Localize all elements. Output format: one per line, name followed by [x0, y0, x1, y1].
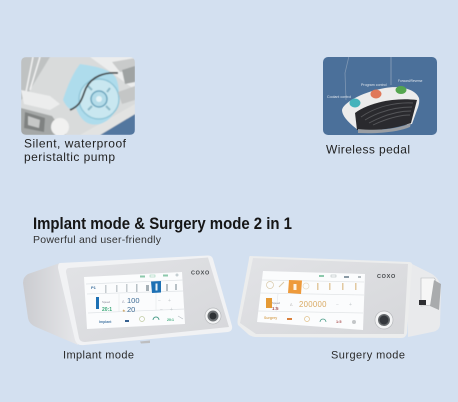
active tab [151, 281, 161, 293]
touchscreen [84, 272, 185, 329]
panel: peristaltic pump photo [21, 57, 135, 136]
touchscreen: + [349, 302, 352, 308]
touchscreen: + [170, 307, 173, 313]
control knob [375, 311, 393, 329]
text: wireless pedal caption: Wireless pedal [326, 142, 410, 156]
mode label: Surgery [264, 316, 277, 320]
text: implant mode label: Implant mode [63, 350, 134, 362]
touchscreen: Speed [272, 301, 281, 305]
touchscreen: 20:1 [167, 318, 174, 322]
control knob [205, 308, 221, 324]
touchscreen: + [168, 298, 171, 304]
touchscreen: − [158, 298, 161, 304]
panel: wireless pedal photo: Forward/Reverse [398, 79, 423, 83]
handpiece dock [408, 262, 441, 337]
torque value: 20 [127, 305, 135, 314]
speed value: 100 [127, 296, 140, 305]
device: implant mode unit [23, 256, 232, 345]
front face [238, 256, 412, 338]
text: pump caption: Silent, waterproof [24, 136, 127, 150]
touchscreen: ∆ [122, 299, 125, 304]
touchscreen: 1:5 [272, 306, 279, 311]
speed value: 200000 [299, 300, 327, 309]
active tab [288, 280, 302, 294]
touchscreen: Speed [102, 300, 111, 304]
front face [58, 256, 232, 345]
touchscreen: ★ [122, 308, 126, 313]
mode label: Implant [99, 320, 112, 324]
touchscreen: ∆ [290, 302, 293, 307]
side of case [23, 263, 78, 345]
text: pump caption second line: peristaltic pump [24, 150, 115, 164]
panel: wireless pedal photo [323, 55, 437, 135]
brand logo: COXO [377, 274, 396, 280]
touchscreen: 20:1 [102, 307, 112, 313]
heading: Implant mode & Surgery mode 2 in 1 [33, 215, 292, 233]
device: surgery mode unit [238, 256, 441, 338]
touchscreen: 1:5 [336, 320, 342, 324]
panel: wireless pedal photo: Program control [361, 83, 387, 87]
brand logo: COXO [191, 270, 210, 276]
panel: wireless pedal photo: Coolant control [327, 95, 351, 99]
text: surgery mode label: Surgery mode [331, 350, 405, 362]
touchscreen: P1 [91, 285, 97, 290]
touchscreen: − [336, 302, 339, 308]
touchscreen [257, 271, 365, 330]
touchscreen: − [160, 307, 163, 313]
subheading: Powerful and user-friendly [33, 234, 162, 246]
